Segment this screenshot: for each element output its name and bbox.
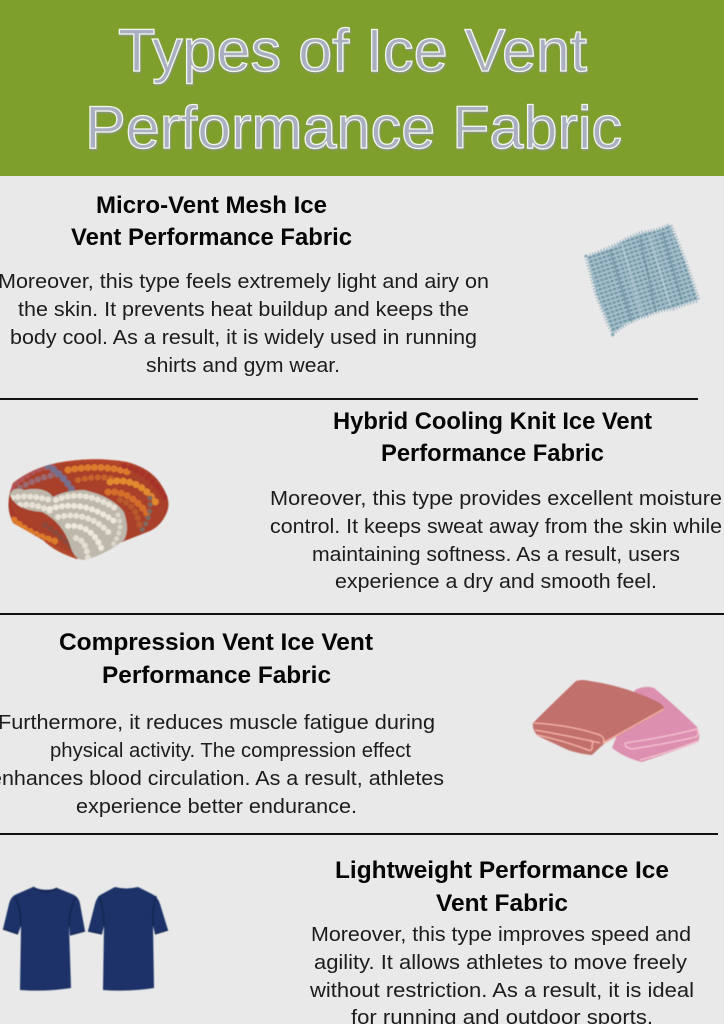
text block: hybrid cooling knit: maintaining softness. As a result, users (312, 543, 680, 566)
panel: hybrid cooling knit (8, 408, 722, 593)
t-shirt back (88, 887, 168, 991)
text block: hybrid cooling knit: Moreover, this type provides excellent moisture (270, 487, 722, 510)
text block: micro-vent mesh: shirts and gym wear. (146, 354, 340, 377)
heading: lightweight performance: Lightweight Performance Ice (335, 857, 669, 884)
text block: micro-vent mesh: body cool. As a result, it is widely used in running (10, 326, 477, 349)
title banner (0, 0, 724, 176)
text block: hybrid cooling knit: experience a dry and smooth feel. (335, 570, 657, 593)
divider 1 (0, 398, 698, 400)
heading: compression vent (59, 629, 373, 689)
icon: navy t-shirts front and back (3, 887, 168, 991)
text block: micro-vent mesh: Moreover, this type feels extremely light and airy on (0, 270, 489, 293)
text block: compression vent: experience better endurance. (76, 795, 357, 818)
text block: micro-vent mesh (0, 270, 489, 377)
title: Types of Ice Vent (118, 17, 587, 84)
text block: lightweight performance: without restriction. As a result, it is ideal (309, 979, 694, 1002)
divider 3 (0, 833, 718, 835)
heading: micro-vent mesh (71, 192, 352, 251)
icon: folded pink towels (533, 680, 699, 762)
heading: compression vent: Performance Fabric (102, 662, 331, 689)
text block: compression vent (0, 711, 444, 818)
panel: compression vent (0, 629, 699, 818)
heading: hybrid cooling knit: Hybrid Cooling Knit Ice Vent (333, 408, 652, 435)
text block: compression vent: enhances blood circulation. As a result, athletes (0, 767, 444, 790)
heading: hybrid cooling knit: Performance Fabric (381, 440, 604, 467)
heading: lightweight performance: Vent Fabric (436, 890, 568, 917)
icon: mesh fabric swatch (587, 225, 698, 333)
panel: micro-vent mesh (0, 192, 698, 377)
text block: hybrid cooling knit: control. It keeps sweat away from the skin while (270, 515, 722, 538)
heading: hybrid cooling knit (333, 408, 652, 467)
heading: lightweight performance (335, 857, 669, 917)
title (85, 17, 622, 161)
title: Performance Fabric (85, 94, 622, 161)
text block: lightweight performance (309, 923, 694, 1024)
text block: compression vent: physical activity. The compression effect (50, 739, 411, 762)
heading: micro-vent mesh: Micro-Vent Mesh Ice (96, 192, 327, 219)
text block: micro-vent mesh: the skin. It prevents heat buildup and keeps the (18, 298, 469, 321)
t-shirt front (3, 887, 85, 991)
heading: compression vent: Compression Vent Ice Vent (59, 629, 373, 656)
text block: lightweight performance: Moreover, this type improves speed and (311, 923, 691, 946)
divider 2 (0, 613, 724, 615)
text block: lightweight performance: agility. It allows athletes to move freely (314, 951, 688, 974)
panel: lightweight performance (3, 857, 694, 1024)
heading: micro-vent mesh: Vent Performance Fabric (71, 224, 352, 251)
text block: compression vent: Furthermore, it reduces muscle fatigue during (0, 711, 435, 734)
icon: chunky knit blanket (8, 459, 168, 560)
text block: hybrid cooling knit (270, 487, 722, 593)
